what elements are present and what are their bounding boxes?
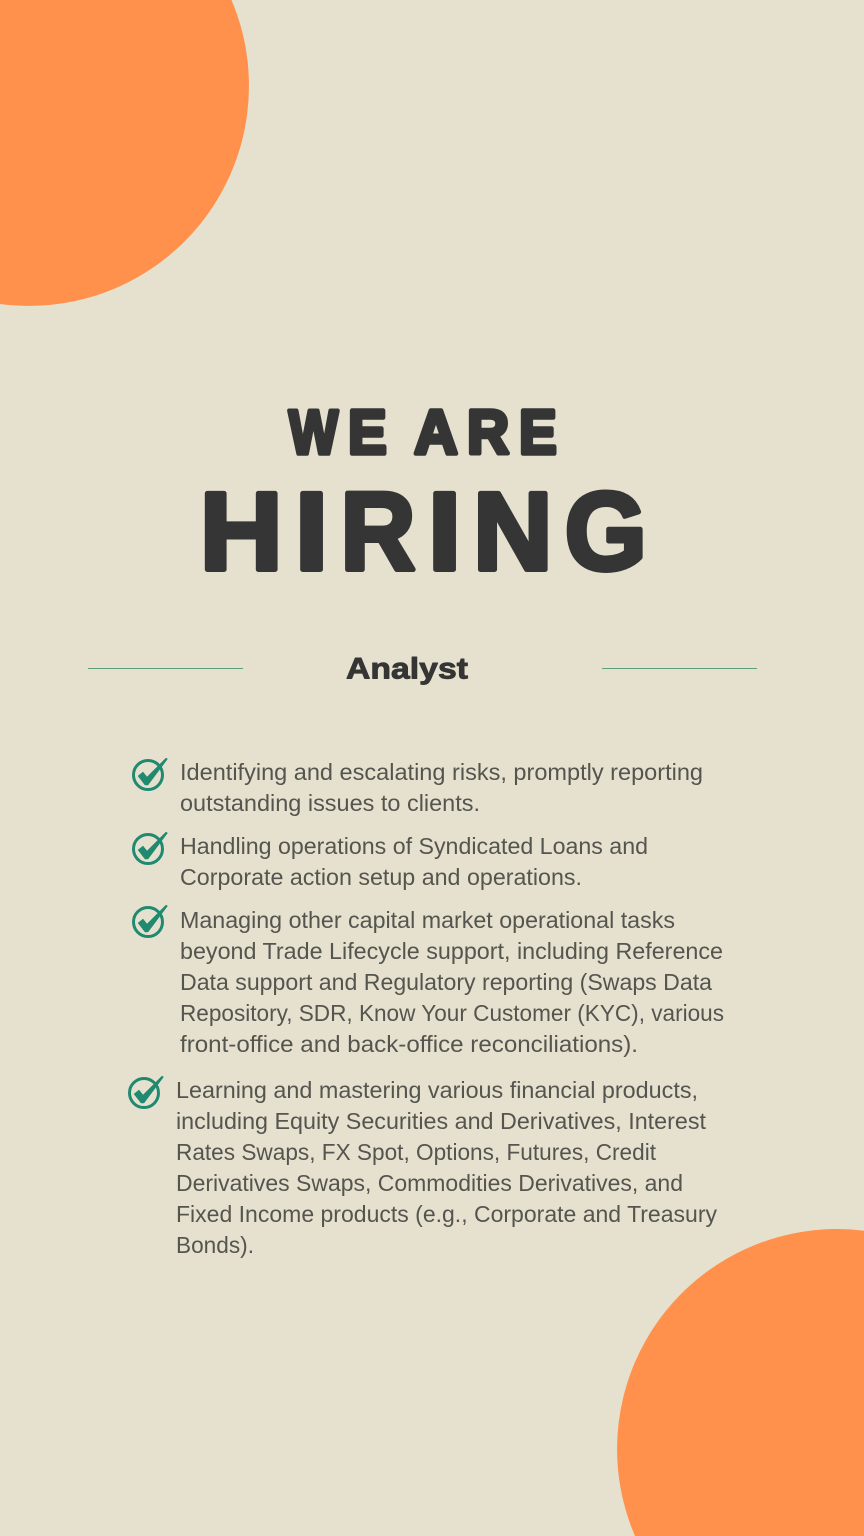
- responsibilities list: [130, 758, 724, 1258]
- item 4 text: Fixed Income products (e.g., Corporate and Treasury: [176, 1201, 717, 1227]
- decorative circle: bottom right: [617, 1229, 864, 1536]
- heading line: hiring: H: [200, 470, 283, 594]
- item 2 text: Corporate action setup and operations.: [180, 864, 582, 890]
- item 4 text: including Equity Securities and Derivatives, Interest: [176, 1108, 707, 1134]
- heading line: hiring: N: [473, 470, 552, 594]
- heading line: we are: A: [414, 399, 458, 468]
- heading line: we are: E: [519, 399, 557, 468]
- item 3 text: front-office and back-office reconciliations).: [180, 1031, 638, 1057]
- item 2 text: [180, 833, 648, 890]
- item 4 text: Learning and mastering various financial products,: [176, 1077, 698, 1103]
- decorative circle: top left: [0, 0, 249, 306]
- icon: green check in circle: [134, 905, 168, 936]
- list item 1: [134, 758, 703, 816]
- heading line: hiring: R: [340, 470, 416, 594]
- job title: analyst: Analyst: [346, 652, 468, 686]
- heading line: hiring: I: [428, 470, 461, 594]
- heading line: hiring: G: [565, 470, 647, 594]
- item 1 text: [180, 759, 703, 816]
- item 4 text: Rates Swaps, FX Spot, Options, Futures, Credit: [176, 1139, 657, 1165]
- title: we are hiring: [200, 399, 647, 594]
- item 3 text: Managing other capital market operational tasks: [180, 907, 675, 933]
- item 3 text: [180, 907, 724, 1057]
- list item 4: [130, 1076, 717, 1258]
- item 1 text: Identifying and escalating risks, promptly reporting: [180, 759, 703, 785]
- item 3 text: Data support and Regulatory reporting (Swaps Data: [180, 969, 712, 995]
- icon: green check in circle: [130, 1076, 164, 1108]
- item 1 text: outstanding issues to clients.: [180, 790, 480, 816]
- list item 3: [134, 905, 724, 1057]
- heading line: hiring: I: [295, 470, 328, 594]
- item 2 text: Handling operations of Syndicated Loans and: [180, 833, 648, 859]
- item 3 text: Repository, SDR, Know Your Customer (KYC), various: [180, 1000, 724, 1026]
- icon: green check in circle: [134, 758, 168, 790]
- heading line: we are: E: [348, 399, 387, 468]
- item 4 text: Bonds).: [176, 1232, 254, 1258]
- item 4 text: Derivatives Swaps, Commodities Derivatives, and: [176, 1170, 683, 1196]
- item 4 text: [176, 1077, 717, 1258]
- heading line: we are: R: [467, 399, 509, 468]
- heading line: we are: W: [289, 399, 338, 468]
- item 3 text: beyond Trade Lifecycle support, including Reference: [180, 938, 723, 964]
- icon: green check in circle: [134, 832, 168, 864]
- list item 2: [134, 832, 648, 890]
